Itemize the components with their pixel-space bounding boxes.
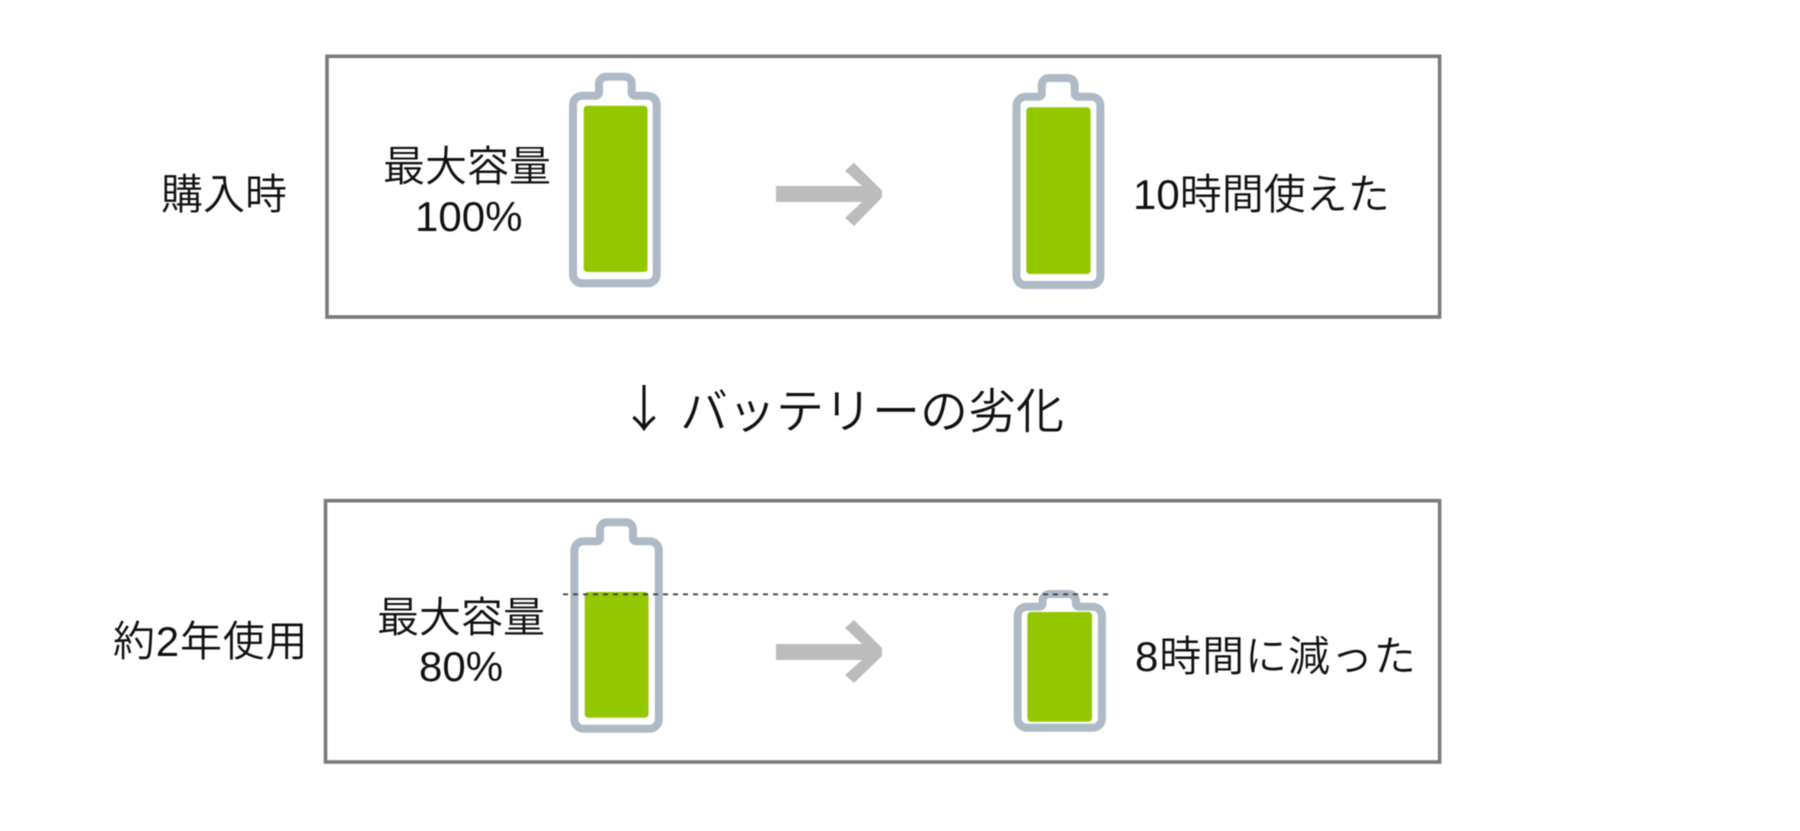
text: usable for 10 hours: 10時間使えた [1133,171,1390,218]
icon: battery at 80% capacity [574,522,659,729]
text: maximum capacity 100%: 最大容量 [383,143,551,190]
text: maximum capacity 80%: 80% [419,643,503,690]
icon: full battery, 100% capacity [573,77,657,283]
text: maximum capacity 80% [377,594,545,690]
text: maximum capacity 100% [383,143,551,240]
arrow: capacity to runtime [776,620,882,683]
text: maximum capacity 80%: 最大容量 [377,594,545,641]
label: after about 2 years of use: 約2年使用 [113,618,308,665]
panel: at purchase [327,56,1440,317]
panel: after about 2 years [326,501,1440,762]
arrow: capacity to runtime [776,163,882,226]
heading: battery degradation [619,370,1064,442]
text: maximum capacity 100%: 100% [415,193,522,240]
text: reduced to 8 hours: 8時間に減った [1135,633,1417,680]
icon: smaller battery, runtime 8 hours [1018,594,1102,728]
heading: battery degradation: バッテリーの劣化 [680,386,1064,439]
heading: battery degradation: ↓ [619,370,669,442]
label: at purchase: 購入時 [161,171,287,218]
dotted guide line at 80% level [563,593,1109,595]
icon: full battery, runtime 10 hours [1016,78,1100,285]
